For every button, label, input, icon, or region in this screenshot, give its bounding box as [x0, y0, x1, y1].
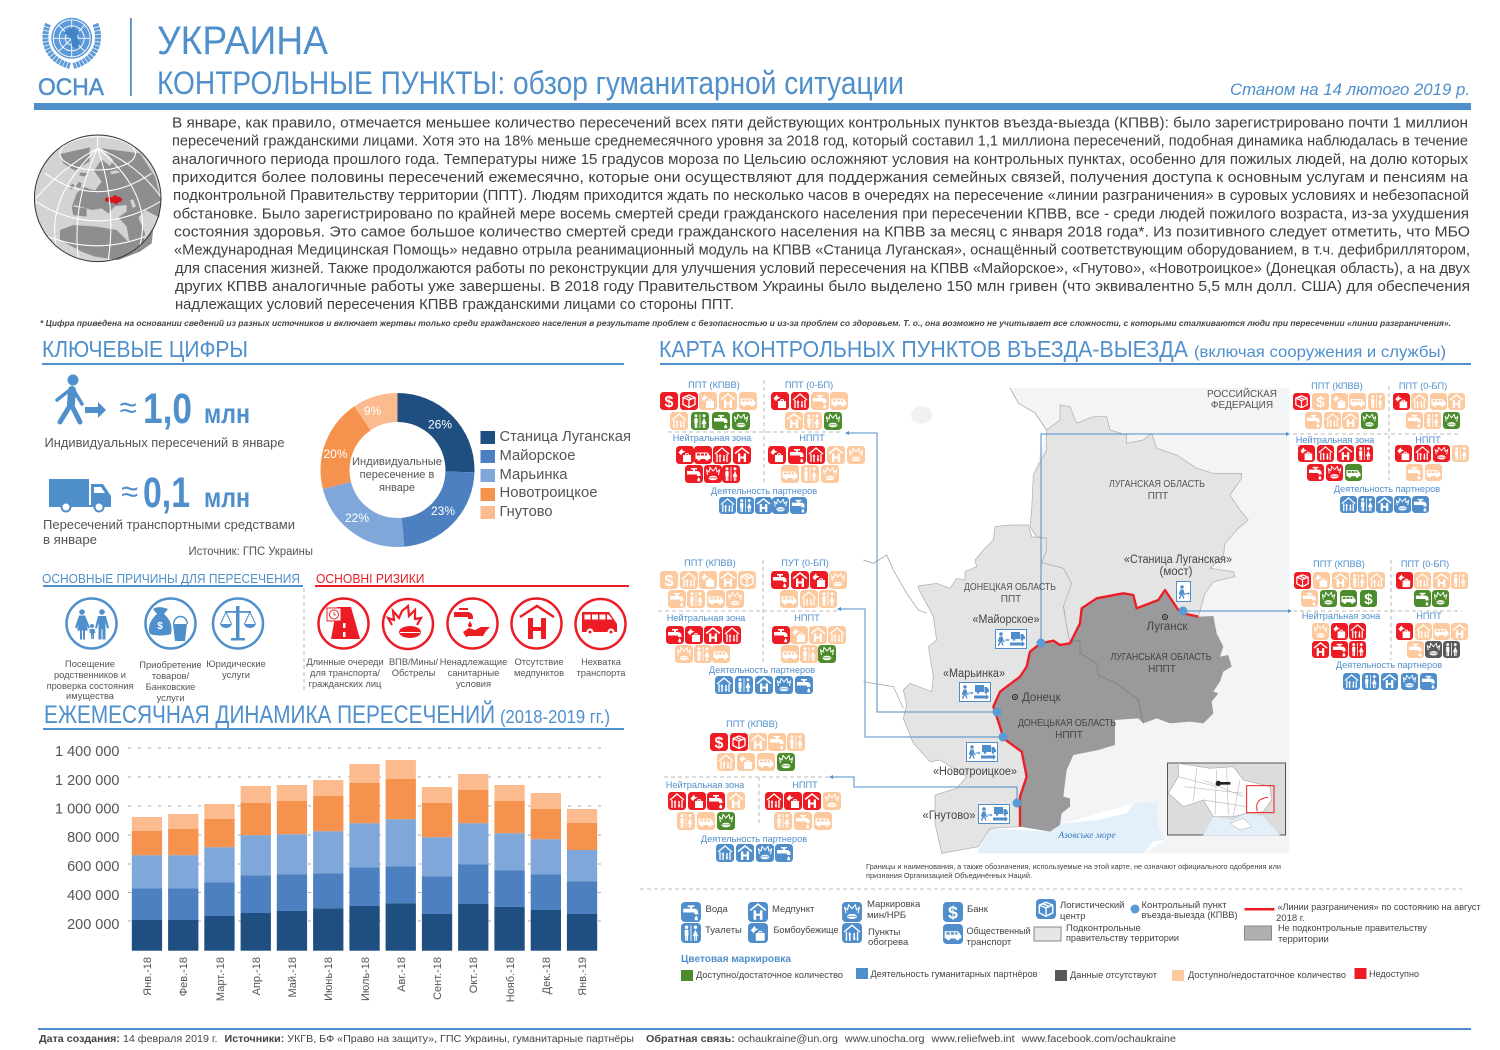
risk labels: гражданских лиц [309, 679, 382, 689]
risk labels: Ненадлежащие [440, 657, 507, 667]
y axis labels: 1 200 000 [55, 773, 120, 789]
panel: monthly dynamics [43, 699, 624, 1002]
icon: money bag and bucket: $ [157, 621, 163, 632]
map leader lines [829, 431, 1292, 803]
legend: map symbols: Не подконтрольные правительству [1278, 923, 1427, 934]
panel: checkpoint Hnutove services: Деятельность партнеров [701, 834, 807, 844]
legend: map symbols: въезда-выезда (КПВВ) [1142, 910, 1238, 921]
map labels: «Майорское» [972, 614, 1040, 626]
stat: vehicle crossings: 0,1 [143, 469, 190, 517]
panel: checkpoint Novotroitske services: НППТ [794, 613, 820, 623]
x axis month labels: Авг.-18 [396, 957, 408, 992]
legend: colour coding: Недоступно [1369, 969, 1419, 980]
reason labels: Юридические [206, 659, 266, 669]
map labels: «Марьинка» [943, 668, 1005, 680]
x axis month labels: Май.-18 [287, 957, 299, 998]
header bar [34, 103, 1471, 110]
reason labels: Приобретение [139, 660, 202, 670]
legend: service icons: Пункты [868, 927, 900, 938]
panel: main reasons for crossing [42, 571, 303, 703]
panel: checkpoint Mayorske services: НППТ [1416, 611, 1442, 621]
intro paragraph: состояния здоровья. Это самое большое количество смертей среди гражданского населения на КПВВ за месяц с января 2018 года*. Из позитивного следует отметить, что МБО [174, 224, 1470, 240]
stat: individual crossings: 1,0 [143, 385, 192, 433]
intro paragraph: обстановке. Было зарегистрировано по крайней мере восемь смертей среди гражданского населения при пересечении КПВВ, все - среди людей пожилого возраста, из-за ухудшения [173, 206, 1469, 222]
map labels: Донецк [1022, 692, 1062, 704]
panel: checkpoint Hnutove services: ППТ (КПВВ) [726, 719, 778, 729]
panel: main risks [306, 571, 629, 689]
intro paragraph: других КПВВ аналогичные работы уже завершены. В 2018 году Правительством Украины было выделено 150 млн гривен (что эквивалентно 5,5 млн долл. США) для обеспечения [175, 279, 1470, 295]
legend: service icons: Логистический [1060, 900, 1124, 911]
map labels: ДОНЕЦКАЯ ОБЛАСТЬ [964, 582, 1056, 593]
stat: vehicle crossings: Пересечений транспортными средствами [43, 517, 295, 532]
panel: key figures [42, 336, 631, 558]
donut chart: 9% [364, 404, 382, 418]
legend: map symbols: правительству территории [1066, 933, 1179, 944]
map labels: Азовське море [1057, 831, 1116, 841]
heading: map: (включая сооружения и службы) [1194, 344, 1446, 361]
panel: checkpoint Stanytsia Luhanska services: ППТ (КПВВ) [1311, 381, 1363, 391]
donut chart: январе [379, 482, 415, 494]
legend: service icons: центр [1060, 911, 1086, 922]
icon: family [66, 598, 116, 648]
x axis month labels: Окт.-18 [468, 957, 480, 993]
panel: checkpoint Marinka services [660, 380, 865, 514]
Donetsk government-controlled area [903, 525, 1072, 853]
donut legend [480, 429, 631, 520]
reason labels: Посещение [65, 659, 115, 669]
risk labels: транспорта [577, 668, 626, 678]
panel: checkpoint Novotroitske services [658, 558, 847, 694]
y axis labels: 1 000 000 [55, 802, 120, 818]
reason labels: Банковские [146, 682, 195, 692]
stacked bar chart [132, 760, 597, 951]
x axis month labels: Дек.-18 [541, 957, 553, 994]
map of checkpoints [829, 387, 1292, 880]
reason labels: товаров/ [152, 671, 190, 681]
heading: monthly dynamics: ЕЖЕМЕСЯЧНАЯ ДИНАМИКА ПЕРЕСЕЧЕНИЙ [44, 699, 495, 729]
heading: reasons: ОСНОВНЫЕ ПРИЧИНЫ ДЛЯ ПЕРЕСЕЧЕНИЯ [42, 571, 300, 586]
donut chart: 22% [345, 511, 369, 525]
donut legend: Майорское [500, 448, 576, 464]
x axis month labels: Июль-18 [360, 957, 372, 1001]
map areas [863, 388, 1289, 853]
legend: service icons: Бомбоубежище [774, 925, 838, 936]
legend: map symbols: территории [1278, 934, 1329, 945]
risk labels: Длинные очереди [306, 657, 384, 667]
risk labels: Отсутствие [514, 657, 564, 667]
panel: checkpoint Novotroitske services: ППТ (КПВВ) [684, 558, 736, 568]
title: Ukraine: УКРАИНА [157, 19, 328, 63]
heading: map [659, 336, 1471, 365]
donut chart: Индивидуальные [352, 456, 442, 468]
heading: map: КАРТА КОНТРОЛЬНЫХ ПУНКТОВ ВЪЕЗДА-ВЫЕЗДА [659, 336, 1189, 362]
panel: checkpoint Stanytsia Luhanska services: НППТ [1415, 435, 1441, 445]
panel: checkpoint Mayorske services: Нейтральная зона [1302, 611, 1381, 621]
legend: service icons: Банк [967, 904, 989, 915]
header divider [130, 18, 132, 96]
x axis month labels: Янв.-18 [142, 957, 154, 996]
donut chart: пересечение в [360, 469, 434, 481]
icon: truck [49, 479, 111, 512]
risk labels: ВПВ/Мины/ [389, 657, 438, 667]
donut legend: Станица Луганская [500, 429, 631, 445]
stat: individual crossings: ≈ [120, 390, 137, 425]
heading: risks: ОСНОВНІ РИЗИКИ [316, 571, 424, 586]
icon: scales of justice [213, 598, 263, 648]
legend: colour coding [681, 954, 1419, 981]
y axis labels: 600 000 [67, 859, 120, 875]
map labels: НППТ [1055, 730, 1083, 741]
x axis month labels [142, 957, 589, 1002]
legend: service icons: Маркировка [867, 899, 921, 910]
legend: map symbols: Подконтрольные [1066, 923, 1141, 934]
non-government-controlled area [993, 590, 1232, 832]
legend: colour coding: Данные отсутствуют [1070, 970, 1158, 981]
donut chart: 26% [428, 418, 452, 432]
map labels: «Новотроицкое» [933, 766, 1017, 778]
donut legend: Марьинка [500, 467, 568, 483]
map labels: ЛУГАНСКАЯ ОБЛАСТЬ [1109, 479, 1205, 490]
stat: vehicle crossings [43, 469, 295, 547]
reason labels: услуги [157, 693, 184, 703]
legend: colour coding: Доступно/достаточное количество [696, 970, 843, 981]
globe locator [34, 135, 161, 262]
inset locator map [1168, 763, 1286, 835]
OCHA wordmark: OCHA [38, 74, 104, 101]
panel: checkpoint Stanytsia Luhanska services: Деятельность партнеров [1334, 484, 1440, 494]
stat: vehicle crossings: млн [204, 482, 250, 513]
panel: checkpoint Mayorske services: ППТ (КПВВ) [1313, 559, 1365, 569]
x axis month labels: Сент.-18 [432, 957, 444, 1000]
intro paragraph: пересечений гражданскими лицами. Хотя это на 18% меньше среднемесячного уровня за 2018 год, который составил 1,1 миллиона пересечений, подобная динамика наблюдалась в течение [172, 134, 1468, 150]
icon: medical point house [512, 598, 562, 648]
legend: map symbols: Контрольный пункт [1142, 900, 1227, 911]
legend: colour coding: Доступно/недостаточное количество [1188, 970, 1346, 981]
intro paragraph: аналогичного периода прошлого года. Температуры ниже 15 градусов мороза по Цельсию осложняют условия на контрольных пунктах, особенно для пожилых людей, на долю которых [172, 152, 1469, 168]
legend: service icons: мин/НРБ [867, 910, 906, 921]
reason labels: проверка состояния [47, 681, 133, 691]
legend: service icons: Туалеты [705, 925, 742, 936]
risk labels: Обстрелы [392, 668, 436, 678]
intro paragraph: «Международная Медицинская Помощь» недавно отрыла реанимационный модуль на КПВВ «Станица Луганская», оснащённый соответствующим оборудованием, в т.ч. дефибриллятором, [174, 243, 1470, 259]
checkpoint markers [992, 606, 1188, 808]
footer [38, 1028, 1471, 1045]
reason labels [47, 659, 266, 703]
icon: bus [576, 599, 626, 649]
map labels: ДОНЕЦЬКАЯ ОБЛАСТЬ [1018, 718, 1116, 729]
y axis labels: 400 000 [67, 888, 120, 904]
icon: queues on road [318, 598, 368, 648]
map labels: ЛУГАНСЬКАЯ ОБЛАСТЬ [1110, 652, 1212, 663]
map labels: ППТ [1148, 491, 1168, 502]
y axis labels [55, 744, 120, 933]
intro paragraph: приходится более половины пересечений ежемесячно, которые они осуществляют для поддержания семейных связей, получения доступа к основным услугам и пенсиям на [172, 170, 1469, 186]
legend: map symbols [1034, 900, 1481, 945]
x axis month labels: Март.-18 [215, 957, 227, 1001]
panel: checkpoint Stanytsia Luhanska services: ППТ (0-БП) [1399, 381, 1447, 391]
legend: map symbols: 2018 г. [1276, 913, 1305, 924]
y axis labels: 1 400 000 [55, 744, 120, 760]
footer: date and sources: Дата создания: 14 февраля 2019 г. Источники: УКГВ, БФ «Право на защиту», ГПС Украины, гуманитарные партнёры [39, 1033, 634, 1045]
reason labels: имущества [66, 691, 115, 701]
legend: service icons [681, 899, 1124, 948]
stat: vehicle crossings: ≈ [121, 474, 138, 509]
subtitle: КОНТРОЛЬНЫЕ ПУНКТЫ: обзор гуманитарной ситуации [157, 65, 904, 101]
legend: service icons: Общественный [966, 926, 1030, 937]
panel: checkpoint Hnutove services: Нейтральная зона [666, 780, 745, 790]
donut legend: Новотроицкое [500, 485, 598, 501]
legend: map symbols: «Линии разграничения» по состоянию на август [1278, 902, 1481, 913]
map labels: ФЕДЕРАЦИЯ [1211, 400, 1273, 411]
x axis month labels: Июнь-18 [323, 957, 335, 1001]
panel: checkpoint Marinka services: НППТ [799, 433, 825, 443]
map labels: «Станица Луганская» [1124, 554, 1232, 566]
reason labels: услуги [222, 670, 250, 680]
stat: vehicle crossings: в январе [43, 532, 97, 547]
legend: service icons: обогрева [868, 937, 909, 948]
panel: checkpoint Hnutove services: НППТ [792, 780, 818, 790]
donut chart: 23% [431, 504, 455, 518]
header [34, 18, 1471, 110]
panel: checkpoint Novotroitske services: ПУТ (0-БП) [781, 558, 829, 568]
y axis labels: 800 000 [67, 830, 120, 846]
risk labels: условия [456, 679, 491, 689]
source note: Источник: ГПС Украины [188, 546, 313, 558]
x axis month labels: Фев.-18 [178, 957, 190, 996]
stat: individual crossings: млн [204, 398, 250, 429]
stat: individual crossings [44, 385, 284, 450]
intro paragraph: надлежащих условий пересечения КПВВ гражданскими лицами со стороны ППТ. [175, 297, 734, 313]
legend: colour coding: Цветовая маркировка [681, 954, 791, 965]
x axis month labels: Нояб.-18 [505, 957, 517, 1002]
risk labels [306, 657, 626, 689]
map legend [681, 899, 1481, 981]
panel: checkpoint Marinka services: ППТ (0-БП) [785, 380, 833, 390]
panel: checkpoint Mayorske services: ППТ (0-БП) [1401, 559, 1449, 569]
x axis month labels: Апр.-18 [251, 957, 263, 995]
donut chart: 20% [323, 447, 348, 461]
stat: individual crossings: Индивидуальных пересечений в январе [44, 435, 284, 450]
risk labels: для транспорта/ [310, 668, 380, 678]
legend: service icons: Медпункт [772, 904, 815, 915]
risk labels: санитарные [448, 668, 499, 678]
checkpoint crossing-type icons [960, 582, 1190, 824]
panel: checkpoint Marinka services: Деятельность партнеров [711, 486, 817, 496]
sea [950, 802, 1165, 853]
UN emblem logo [45, 18, 98, 66]
map disclaimer [866, 862, 1281, 880]
panel: checkpoint Mayorske services: Деятельность партнеров [1336, 660, 1442, 670]
map labels: «Гнутово» [922, 810, 976, 822]
legend: colour coding: Деятельность гуманитарных партнёров [870, 969, 1038, 980]
y axis labels: 200 000 [67, 917, 120, 933]
Luhansk government-controlled area [1030, 405, 1248, 643]
intro paragraph: В январе, как правило, отмечается меньшее количество пересечений всех пяти действующих контрольных пунктов въезда-выезда (КПВВ): было зарегистрировано почти 1 миллион [172, 116, 1468, 132]
reason labels: родственников и [54, 670, 126, 680]
intro paragraph: подконтрольной Правительству территории (ППТ). Людям приходится ждать по несколько часов в очередях на пересечение «линии разграничения» в суровых условиях и небезопасной [173, 188, 1469, 204]
map labels: РОССИЙСКАЯ [1207, 387, 1277, 400]
donut chart [323, 404, 460, 532]
contact line [993, 590, 1198, 827]
panel: checkpoint Novotroitske services: Нейтральная зона [667, 613, 746, 623]
panel: checkpoint Marinka services: ППТ (КПВВ) [688, 380, 740, 390]
map disclaimer: Границы и наименования, а также обозначения, используемые на этой карте, не означают официального одобрения или [866, 862, 1281, 871]
panel: checkpoint Marinka services: Нейтральная зона [673, 433, 752, 443]
map disclaimer: признания Организацией Объединённых Наций. [866, 871, 1032, 880]
panel: checkpoint Hnutove services [664, 719, 841, 862]
x axis month labels: Янв.-19 [577, 957, 589, 996]
map labels [922, 387, 1277, 841]
intro paragraph: для спасения жизней. Также продолжаются работы по реконструкции для улучшения условий пересечения на КПВВ «Майорское», «Гнутово», «Новотроицкое» (Донецкая область), а на двух [175, 261, 1471, 277]
legend: service icons: транспорт [966, 937, 1012, 948]
intro paragraph [172, 116, 1471, 313]
date: Станом на 14 лютого 2019 р. [1230, 80, 1470, 99]
map labels: ППТ [1001, 594, 1021, 605]
icon: mine and explosion [383, 599, 433, 649]
panel: checkpoint Stanytsia Luhanska services: Нейтральная зона [1296, 435, 1375, 445]
footer: feedback: Обратная связь: ochaukraine@un.org www.unocha.org www.reliefweb.int www.facebook.com/ochaukraine [646, 1033, 1176, 1045]
footnote: * Цифра приведена на основании сведений из разных источников и включает жертвы только среди гражданского населения в результате проблем с безопасностью и из-за проблем со здоровьем. Т. о., она возможно не учитывает все сложности, с которыми сталкиваются люди при пересечении «линии разграничения». [40, 319, 1451, 328]
heading suffix: years: (2018-2019 гг.) [500, 707, 610, 727]
map labels: НППТ [1148, 664, 1176, 675]
donut legend: Гнутово [500, 504, 552, 520]
risk labels: Нехватка [581, 657, 622, 667]
icon: pedestrian with arrow [57, 374, 106, 422]
legend: service icons: Вода [706, 904, 728, 915]
map labels: Луганск [1147, 621, 1188, 633]
risk labels: медпунктов [514, 668, 564, 678]
heading: key figures: КЛЮЧЕВЫЕ ЦИФРЫ [42, 336, 248, 362]
panel: checkpoint Novotroitske services: Деятельность партнеров [709, 665, 815, 675]
panel: checkpoint Stanytsia Luhanska services [1293, 381, 1469, 513]
map labels: (мост) [1160, 566, 1193, 578]
panel: checkpoint Mayorske services [1293, 559, 1468, 690]
icon: money bag and bucket [146, 598, 196, 648]
icon: tap and hand [448, 598, 498, 648]
